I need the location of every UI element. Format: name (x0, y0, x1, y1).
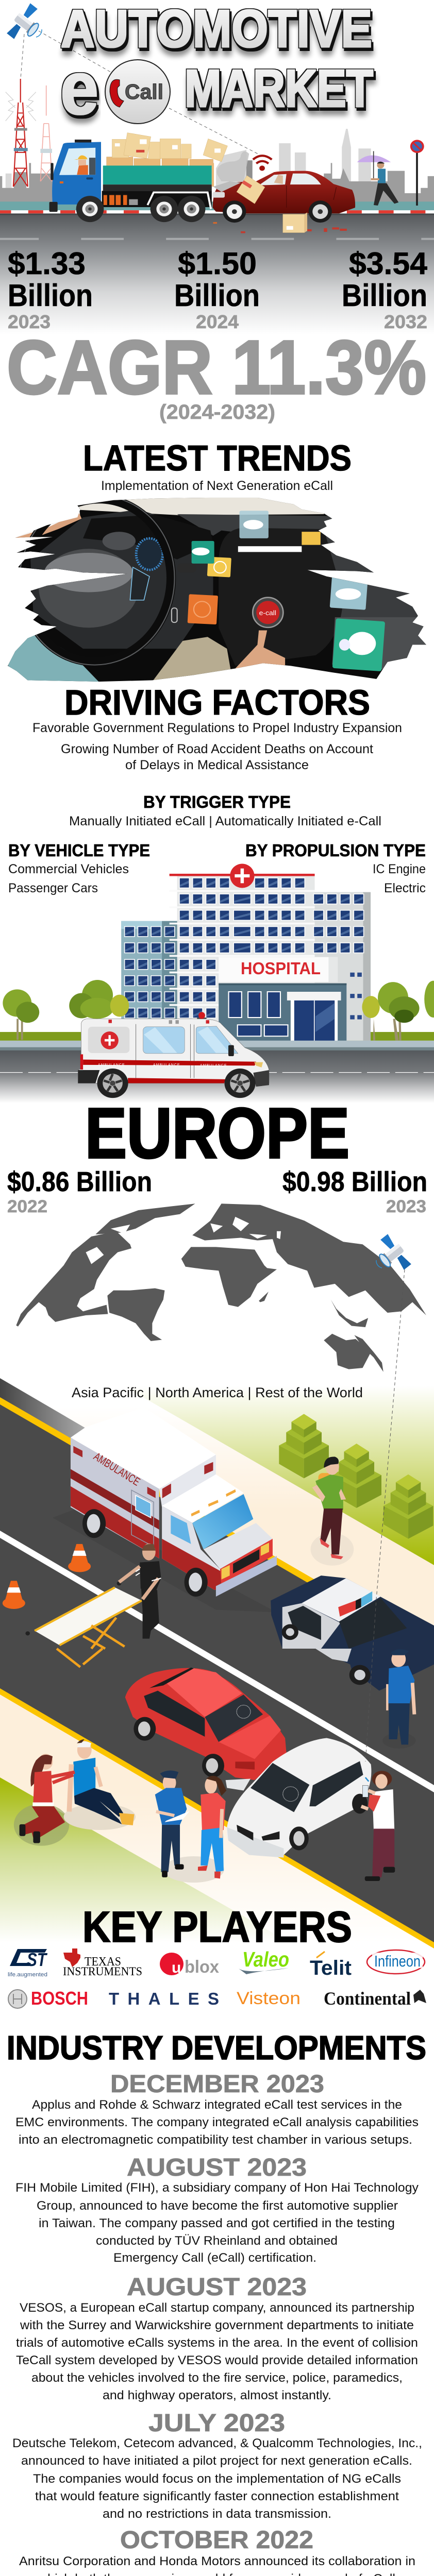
road shadow (53, 1507, 277, 1613)
wifi icon (253, 156, 272, 170)
development: August 2023 VESOS: AUGUST 2023 (127, 2274, 307, 2301)
photo: car interior with e-call button (8, 498, 426, 682)
road with fading gradient (0, 213, 434, 334)
dashed signal line to phone (365, 1269, 405, 1761)
ambulance labels (98, 1063, 227, 1067)
icon: satellite above Asia (371, 1232, 413, 1277)
logo: u-blox: u (172, 1959, 181, 1976)
heading: by propulsion type: IC Engine (373, 862, 426, 876)
development: July 2023: that would feature significantly faster connection establishment (35, 2489, 399, 2503)
stat: 2023 value: Billion (8, 278, 93, 313)
stat: Europe 2022: 2022 (7, 1197, 47, 1216)
development: August 2023 VESOS: and highway operators, almost instantly. (103, 2388, 331, 2402)
city skyline (0, 129, 434, 202)
hospital entrance block (219, 984, 346, 1041)
development: December 2023: Applus and Rohde & Schwarz integrated eCall test services in the (32, 2098, 402, 2112)
development: August 2023 FIH: Group, announced to have become the first automotive supplier (37, 2199, 398, 2213)
development: August 2023 FIH: AUGUST 2023 (127, 2154, 307, 2181)
development: July 2023: Deutsche Telekom, Cetecom advanced, & Qualcomm Technologies, Inc., (12, 2436, 422, 2450)
grass (0, 1032, 434, 1041)
development: August 2023 VESOS: VESOS, a European eCall startup company, announced its partnership (20, 2301, 414, 2315)
title: e: e (60, 46, 98, 130)
heading: driving factors: DRIVING FACTORS (64, 683, 370, 722)
text: latest trend item: Implementation of Next Generation eCall (101, 479, 333, 493)
logo: ST (8, 1949, 47, 1978)
text: driving factor two (61, 742, 373, 772)
development: July 2023: and no restrictions in data transmission. (103, 2507, 331, 2521)
heading: by vehicle type: Passenger Cars (8, 881, 98, 895)
cargo boxes on truck (107, 133, 227, 166)
heading: Europe: EUROPE (85, 1094, 349, 1173)
logo: u-blox (160, 1953, 219, 1977)
logo: ST: ST (27, 1949, 47, 1970)
street scene with hospital and ambulance (0, 864, 434, 1103)
text: driving factor two: of Delays in Medical Assistance (125, 758, 309, 772)
development: August 2023 VESOS (16, 2274, 418, 2402)
phone handset (110, 79, 124, 107)
stretcher base (57, 1649, 103, 1667)
development: August 2023 FIH: FIH Mobile Limited (FIH), a subsidiary company of Hon Hai Technology (15, 2181, 419, 2195)
stat: 2032 value: $3.54 (349, 246, 428, 281)
text: driving factor two: Growing Number of Road Accident Deaths on Account (61, 742, 373, 756)
ambulance van (78, 1012, 269, 1098)
ambulance labels: AMBULANCE (200, 1064, 227, 1067)
CAGR period: (2024-2032) (159, 401, 275, 423)
hospital building (121, 864, 371, 1041)
hero illustration: eCall crash scene (0, 79, 434, 334)
development: August 2023 VESOS: with the Surrey and Warwickshire government departments to initiate (20, 2318, 414, 2332)
development: August 2023 FIH (15, 2154, 419, 2265)
hospital sign (219, 957, 338, 982)
development: August 2023 FIH: in Taiwan. The company passed and got certified in the testing (39, 2216, 395, 2230)
telecom towers (6, 79, 52, 187)
development: August 2023 VESOS: about the vehicles involved to the fire service, police, paramedics, (31, 2371, 403, 2385)
stat: 2024 value: Billion (174, 278, 260, 313)
blue truck (49, 140, 214, 222)
smoke (217, 151, 249, 181)
logos: key players (8, 1947, 426, 2009)
heading: by trigger type: BY TRIGGER TYPE (143, 792, 291, 811)
world map (8, 1204, 426, 1372)
development: October 2022: Anritsu Corporation and Honda Motors announced its collaboration in (19, 2554, 415, 2568)
ambulance labels: AMBULANCE (153, 1063, 180, 1067)
stretcher (25, 1581, 142, 1649)
police car (271, 1575, 434, 1649)
development: August 2023 FIH: Emergency Call (eCall) certification. (113, 2251, 316, 2265)
region list text: Asia Pacific | North America | Rest of the World (72, 1385, 363, 1400)
stat: Europe 2022 (7, 1166, 152, 1216)
development: July 2023: announced to have initiated a pilot project for next generation eCalls. (21, 2454, 412, 2468)
development: December 2023 (15, 2071, 419, 2147)
heading: by vehicle type: BY VEHICLE TYPE (8, 841, 150, 860)
development: October 2022 (19, 2527, 415, 2576)
trees (3, 980, 434, 1040)
logo: Bosch (8, 1988, 88, 2009)
white car (226, 1738, 371, 1858)
development: August 2023 FIH: conducted by TÜV Rheinland and obtained (96, 2234, 338, 2248)
hedges (279, 1414, 433, 1539)
heading: latest trends: LATEST TRENDS (83, 438, 352, 478)
stat: 2032 value: 2032 (384, 311, 427, 332)
logo: Texas Instruments (63, 1948, 142, 1978)
logo: Visteon: Visteon (237, 1989, 301, 2008)
iso ambulance (71, 1408, 277, 1597)
pedestrian with backpack (311, 1456, 354, 1566)
logo: u-blox: blox (185, 1957, 219, 1977)
isometric lower scene (14, 1649, 434, 1883)
stat: 2023 value: 2023 (8, 311, 51, 332)
logo: Infineon: Infineon (374, 1952, 421, 1970)
text: trigger types: Manually Initiated eCall | Automatically Initiated e-Call (69, 814, 381, 828)
logo: ST: life.augmented (8, 1972, 47, 1978)
development: December 2023: DECEMBER 2023 (110, 2071, 324, 2098)
e-call button (253, 598, 283, 628)
pedestrian with umbrella (357, 151, 398, 206)
development: October 2022: OCTOBER 2022 (120, 2527, 313, 2554)
logo: Texas Instruments: INSTRUMENTS (63, 1965, 142, 1978)
logo: Bosch: BOSCH (31, 1988, 88, 2009)
police officer (382, 1649, 416, 1749)
logo: Valeo: Valeo (242, 1947, 289, 1971)
title: MARKET: MARKET (185, 59, 373, 118)
development: August 2023 VESOS: TeCall system developed by VESOS would provide detailed information (16, 2353, 418, 2367)
sidewalk and road (0, 1041, 434, 1103)
isometric ground: verges and road (0, 1316, 434, 2032)
paramedic and injured person (14, 1739, 136, 1846)
logo: Infineon (367, 1950, 425, 1974)
logo: Continental: Continental (324, 1988, 411, 2009)
police officer with clipboard and woman (155, 1771, 226, 1883)
hospital lettering: HOSPITAL (241, 959, 321, 978)
heading: by vehicle type: Commercial Vehicles (8, 862, 129, 876)
logo: Texas Instruments: TEXAS (85, 1955, 121, 1969)
traffic cones (3, 1544, 91, 1609)
heading: by propulsion type: BY PROPULSION TYPE (245, 841, 426, 860)
stat: Europe 2022: $0.86 Billion (7, 1166, 152, 1197)
stat: 2023 value (8, 246, 93, 332)
development: July 2023 (12, 2410, 422, 2521)
badge: Call circle (105, 60, 170, 124)
development: July 2023: JULY 2023 (148, 2410, 285, 2437)
development: December 2023: EMC environments. The company integrated eCall analysis capabilities (15, 2115, 419, 2129)
e-call button: e-call (259, 609, 276, 617)
crashed red car (212, 171, 355, 223)
ambulance side lettering: AMBULANCE (91, 1450, 142, 1488)
stat: 2023 value: $1.33 (8, 246, 86, 281)
police car rear and wheel (315, 1649, 434, 1691)
heading: key players: KEY PLAYERS (82, 1903, 352, 1951)
stat: 2024 value: 2024 (196, 311, 239, 332)
development: August 2023 VESOS: trials of automotive eCalls systems in the area. In the event of collision (16, 2336, 418, 2350)
debris (213, 222, 347, 233)
roof cross emblem (230, 864, 255, 888)
paramedic (119, 1544, 161, 1639)
text: driving factor one: Favorable Government Regulations to Propel Industry Expansion (32, 721, 402, 735)
ambulance labels: AMBULANCE (98, 1063, 125, 1067)
stat: 2032 value: Billion (342, 278, 427, 313)
development: July 2023: The companies would focus on the implementation of NG eCalls (33, 2472, 401, 2486)
title: AUTOMOTIVE: AUTOMOTIVE (61, 0, 372, 58)
logo: Telit: Telit (310, 1957, 352, 1979)
heading: by propulsion type (245, 841, 426, 895)
stat: Europe 2023 (282, 1166, 427, 1216)
fallen parcels (237, 176, 307, 233)
icon: satellite (5, 2, 47, 46)
dashed signal lines from satellite (21, 31, 260, 155)
red car (125, 1668, 287, 1780)
logo: Thales: THALES (109, 1989, 219, 2008)
stat: Europe 2023: 2023 (386, 1197, 426, 1216)
heading: by vehicle type (8, 841, 150, 895)
stat: 2024 value: $1.50 (178, 246, 257, 281)
Call lettering: Call (125, 80, 163, 104)
no parking sign (410, 140, 424, 206)
man using phone app (361, 1771, 395, 1881)
isometric upper scene (3, 1408, 434, 1649)
teal verge and curb (0, 201, 434, 213)
heading: by propulsion type: Electric (384, 881, 426, 895)
development: December 2023: into an electromagnetic compatibility test chamber in various setups. (19, 2133, 412, 2147)
stat: 2032 value (342, 246, 428, 332)
stat: 2024 value (174, 246, 260, 332)
